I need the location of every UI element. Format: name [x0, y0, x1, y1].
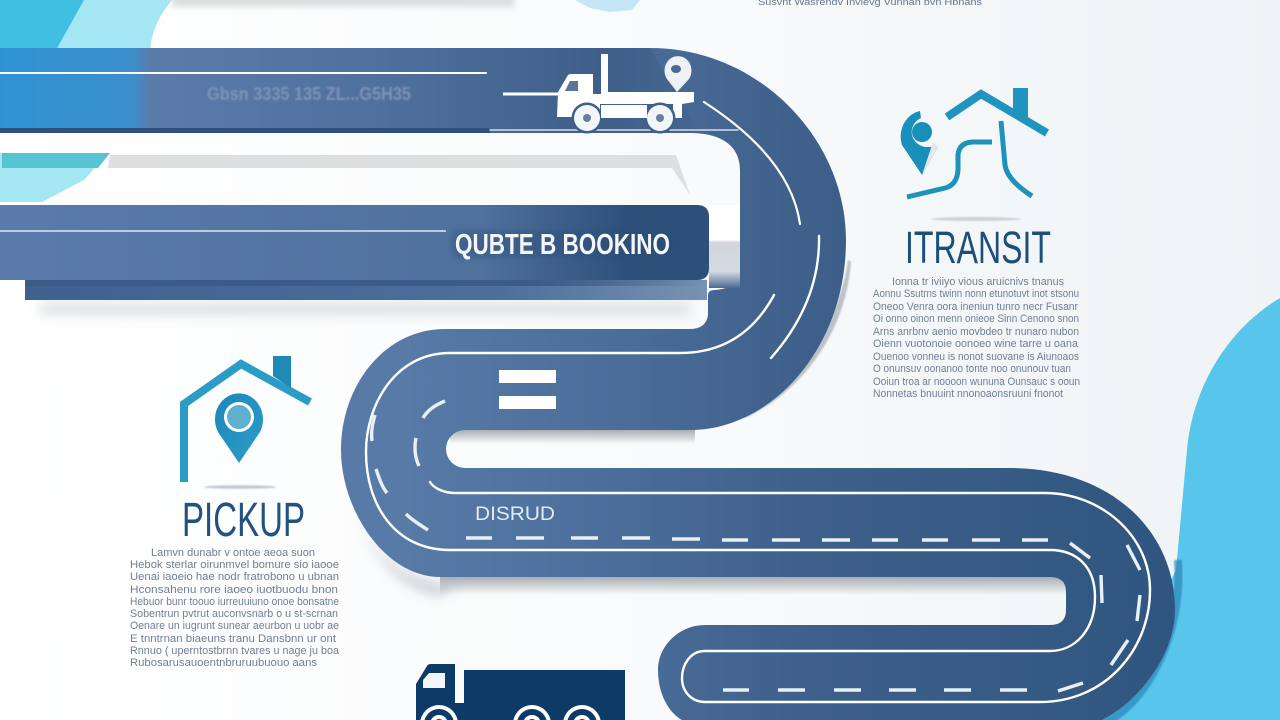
text block: pickup description: Hebok sterlar oirunmvel bomure sio iaooe	[130, 559, 339, 571]
text block: pickup description: E tnntrnan biaeuns tranu Dansbnn ur ont	[130, 633, 336, 645]
bar label: QUBTE B BOOKINO	[455, 229, 670, 261]
heading: transit: ITRANSIT	[905, 222, 1051, 273]
text block: transit description: Ouenoo vonneu is nonot suovane is Aiunoaos	[873, 351, 1079, 363]
text block: pickup description: Sobentrun pvtrut auconvsnarb o u st-scrnan	[130, 608, 338, 620]
text block: transit description: Arns anrbnv aenio movbdeo tr nunaro nubon	[873, 326, 1079, 338]
text block: transit description: Oneoo Venra oora ineniun tunro necr Fusanr	[873, 301, 1078, 313]
text block: transit description: Ooiun troa ar noooon wununa Ounsauc s ooun	[873, 376, 1080, 388]
road center stripes	[499, 370, 556, 409]
road lane markings	[0, 73, 1150, 702]
text block: transit description	[873, 276, 1080, 400]
text block: transit description: Oi onno oinon menn onieoe Sinn Cenono snon	[873, 313, 1079, 325]
icon: house with location pin	[184, 356, 310, 489]
text block: transit description: O onunsuv oonanoo tonte noo onunouv tuan	[873, 363, 1071, 375]
road label: pickup: DISRUD	[475, 504, 555, 525]
road shadows	[40, 155, 1179, 720]
text block: pickup description: Rnnuo ( uperntostbrnn tvares u nage ju boa	[130, 645, 340, 657]
text block: pickup description: Uenai iaoeio hae nodr fratrobono u ubnan	[130, 571, 339, 583]
panel: transit	[873, 88, 1080, 400]
road label: faint top text: Gbsn 3335 135 ZL...G5H35	[207, 84, 411, 104]
right cyan blob	[1100, 298, 1280, 720]
icon: navy delivery truck	[416, 664, 625, 720]
text block: pickup description: Hconsahenu rore iaoeo iuotbuodu bnon	[130, 584, 338, 596]
text block: pickup description: Hebuor bunr toouo iurreuuiuno onoe bonsatne	[130, 596, 339, 608]
text block: pickup description	[130, 547, 340, 669]
text block: pickup description: Oenare un iugrunt sunear aeurbon u uobr ae	[130, 620, 339, 632]
text block: transit description: Nonnetas bnuuint nnonoaonsruuni fnonot	[873, 388, 1063, 400]
text block: transit description: Ionna tr iviiyo vious aruicnivs tnanus	[892, 276, 1064, 288]
top cropped panel fragments	[172, 0, 983, 12]
text block: transit description: Aonnu Ssutrns twinn nonn etunotuvt inot stsonu	[873, 288, 1079, 300]
text block: transit description: Oienn vuotonoie oonoeo wine tarre u oana	[873, 338, 1079, 350]
panel: pickup	[130, 356, 340, 669]
text block: pickup description: Lamvn dunabr v ontoe aeoa suon	[151, 547, 315, 559]
text block: pickup description: Rubosarusauoentnbruruubuouo aans	[130, 657, 317, 669]
quote and booking bar	[0, 205, 740, 300]
top-left cyan accent shapes	[0, 0, 172, 202]
icon: house, pin and route	[901, 88, 1047, 221]
top road band	[0, 48, 700, 133]
icon: location pin on truck	[664, 56, 691, 92]
heading: pickup: PICKUP	[182, 494, 305, 547]
icon: white delivery truck	[503, 54, 694, 134]
